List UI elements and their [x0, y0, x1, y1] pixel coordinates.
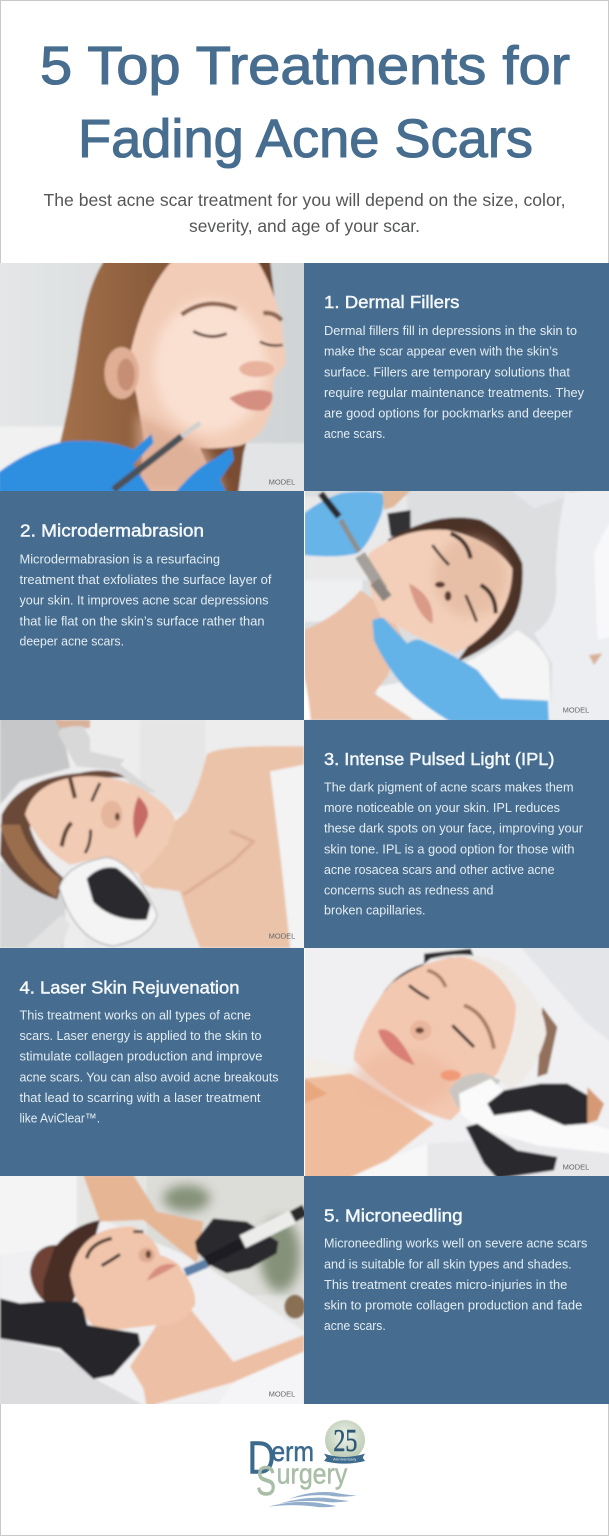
model caption: MODEL — [563, 1165, 589, 1172]
anniversary badge — [324, 1420, 365, 1464]
body text: skin tone. IPL is a good option for those with — [324, 841, 574, 856]
body text: acne scars. — [324, 426, 386, 441]
body text — [20, 551, 272, 649]
body text: your skin. It improves acne scar depressions — [20, 593, 269, 608]
body text: are good options for pockmarks and deeper — [324, 405, 573, 420]
model caption: MODEL — [269, 934, 295, 941]
title: Fading Acne Scars — [78, 109, 533, 169]
model caption: MODEL — [563, 708, 589, 715]
body text: that lie flat on the skin’s surface rather than — [20, 613, 264, 628]
anniversary badge: 25 — [333, 1422, 357, 1458]
header — [40, 36, 570, 236]
panel: dermal fillers — [0, 260, 609, 496]
body text — [324, 1236, 588, 1333]
body text — [324, 323, 584, 441]
body text: surface. Fillers are temporary solutions that — [324, 364, 570, 379]
panel: microdermabrasion — [0, 487, 609, 723]
body text: make the scar appear even with the skin’s — [324, 344, 558, 359]
body text: This treatment works on all types of acne — [20, 1007, 251, 1022]
wordmark — [247, 1431, 348, 1504]
wordmark: D — [247, 1431, 275, 1483]
panel: laser skin rejuvenation — [0, 944, 609, 1180]
body text: Microdermabrasion is a resurfacing — [20, 551, 220, 566]
subtitle — [44, 190, 566, 236]
model caption: MODEL — [269, 480, 295, 487]
photo: microdermabrasion device — [301, 487, 609, 723]
body text: require regular maintenance treatments. They — [324, 385, 584, 400]
body text: Microneedling works well on severe acne scars — [324, 1236, 588, 1251]
blue card 1 — [304, 263, 609, 491]
body text: these dark spots on your face, improving your — [324, 821, 584, 836]
waves — [268, 1492, 357, 1507]
body text: acne scars. You can also avoid acne breakouts — [20, 1069, 279, 1084]
heading: 2. Microdermabrasion — [20, 521, 204, 541]
title: 5 Top Treatments for — [40, 36, 570, 96]
blue card 5 — [304, 1176, 609, 1404]
photo: IPL handpiece — [0, 715, 308, 951]
body text: acne rosacea scars and other active acne — [324, 862, 554, 877]
model caption: MODEL — [269, 1392, 295, 1399]
title — [40, 36, 570, 169]
wordmark: erm — [271, 1436, 314, 1467]
wordmark: urgery — [277, 1458, 348, 1490]
body text: concerns such as redness and — [324, 882, 494, 897]
body text: acne scars. — [324, 1318, 386, 1333]
body text: This treatment creates micro-injuries in the — [324, 1277, 567, 1292]
body text: broken capillaries. — [324, 903, 426, 918]
body text — [324, 779, 584, 918]
heading: 5. Microneedling — [324, 1205, 463, 1225]
body text: and is suitable for all skin types and shades. — [324, 1256, 572, 1271]
subtitle: severity, and age of your scar. — [189, 216, 420, 236]
blue card 2 — [0, 491, 304, 720]
heading: 1. Dermal Fillers — [324, 292, 460, 312]
body text: The dark pigment of acne scars makes them — [324, 779, 574, 794]
logo: DermSurgery 25th anniversary — [247, 1420, 365, 1507]
wordmark: S — [256, 1457, 276, 1504]
body text: treatment that exfoliates the surface layer of — [20, 572, 272, 587]
heading: 4. Laser Skin Rejuvenation — [20, 977, 240, 997]
body text: skin to promote collagen production and fade — [324, 1298, 582, 1313]
body text: scars. Laser energy is applied to the skin to — [20, 1028, 262, 1043]
heading: 3. Intense Pulsed Light (IPL) — [324, 749, 554, 769]
body text: Dermal fillers fill in depressions in the skin to — [324, 323, 577, 338]
photo: laser handpiece — [301, 944, 609, 1180]
subtitle: The best acne scar treatment for you will depend on the size, color, — [44, 190, 566, 210]
body text — [20, 1007, 279, 1125]
panel: intense pulsed light — [0, 715, 609, 951]
panel: microneedling — [0, 1172, 609, 1408]
blue card 3 — [304, 720, 609, 948]
body text: that lead to scarring with a laser treatment — [20, 1090, 261, 1105]
photo: microneedling pen — [0, 1172, 308, 1408]
body text: more noticeable on your skin. IPL reduces — [324, 800, 560, 815]
anniversary badge: Anniversary — [333, 1458, 357, 1462]
body text: like AviClear™. — [20, 1110, 100, 1125]
blue card 4 — [0, 948, 304, 1176]
body text: stimulate collagen production and improve — [20, 1049, 262, 1064]
body text: deeper acne scars. — [20, 634, 124, 649]
photo: dermal filler injection — [0, 260, 308, 496]
